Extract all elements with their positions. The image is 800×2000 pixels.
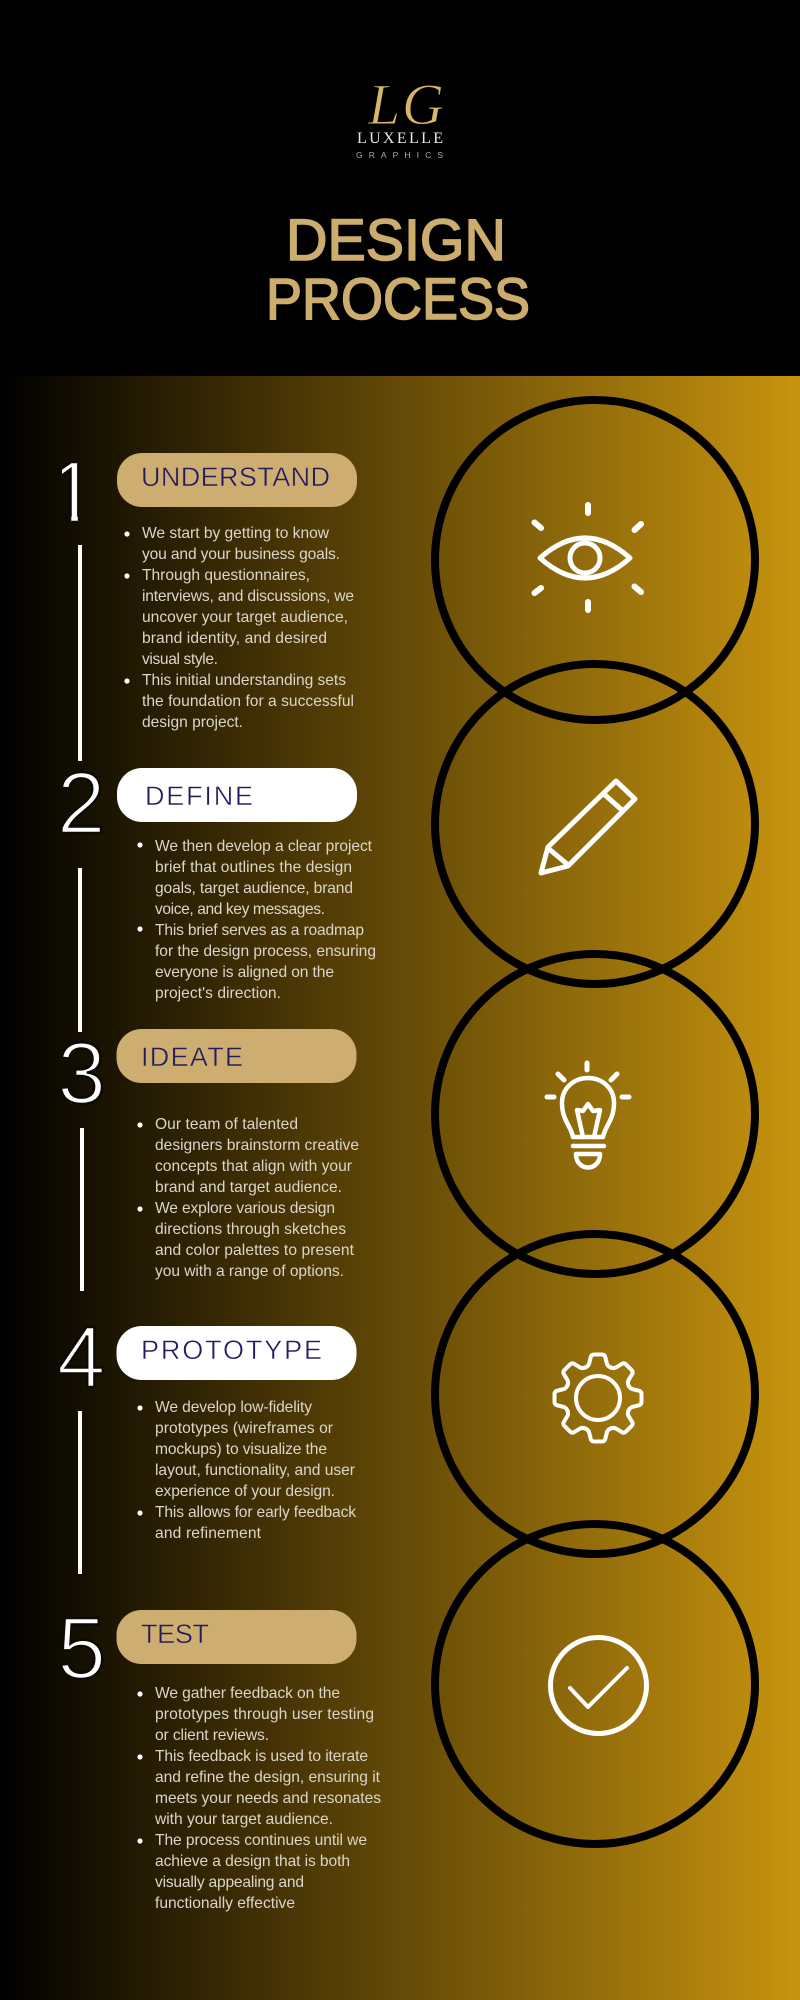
text block: step 1 bullets: brand identity, and desired: [142, 630, 327, 647]
pill: define: [117, 768, 357, 822]
text block: step 3 bullets: We explore various design: [155, 1200, 335, 1217]
text block: step 2 bullets: This brief serves as a roadmap: [155, 922, 364, 939]
logo monogram: G: [402, 72, 444, 137]
text block: step 1 bullets: interviews, and discussions, we: [142, 588, 354, 605]
connector line 3: [80, 1128, 84, 1291]
text block: step 5 bullets: We gather feedback on the: [155, 1685, 340, 1702]
pill: prototype: PROTOTYPE: [141, 1335, 322, 1365]
text block: step 3 bullets: Our team of talented: [155, 1116, 298, 1133]
text block: step 4 bullets: experience of your design.: [155, 1483, 335, 1500]
text block: step 2 bullets: [137, 838, 376, 1002]
pill: test: [116, 1610, 356, 1664]
text block: step 1 bullets: uncover your target audience,: [142, 609, 348, 626]
icon: pencil: [541, 781, 635, 873]
text block: step 4 bullets: prototypes (wireframes or: [155, 1420, 333, 1437]
text block: step 4 bullets: We develop low-fidelity: [155, 1399, 312, 1416]
panel: step 5 test: [58, 1600, 381, 1912]
pill: ideate: IDEATE: [141, 1042, 243, 1072]
text block: step 2 bullets: for the design process, ensuring: [155, 943, 376, 960]
text block: step 3 bullets: you with a range of options.: [155, 1263, 344, 1280]
text block: step 5 bullets: The process continues until we: [155, 1832, 367, 1849]
text block: step 5 bullets: or client reviews.: [155, 1727, 269, 1744]
icon: gear: [554, 1354, 642, 1442]
text block: step 5 bullets: visually appealing and: [155, 1874, 304, 1891]
panel: step 3 ideate: [58, 1025, 359, 1291]
logo: Luxelle Graphics: [356, 72, 444, 160]
text block: step 3 bullets: directions through sketches: [155, 1221, 346, 1238]
text block: step 1 bullets: [124, 525, 354, 731]
logo monogram: [367, 72, 444, 137]
text block: step 5 bullets: achieve a design that is both: [155, 1853, 350, 1870]
icon: check mark: [550, 1638, 646, 1734]
icon: lightbulb: [547, 1063, 629, 1168]
text block: step 5 bullets: and refine the design, ensuring it: [155, 1769, 381, 1786]
pill: ideate: [116, 1029, 356, 1083]
step number 5: 5: [58, 1600, 106, 1697]
panel: step 2 define: [57, 755, 376, 1032]
connector line 2: [78, 868, 82, 1032]
text block: step 1 bullets: We start by getting to know: [142, 525, 330, 542]
logo monogram: L: [367, 72, 400, 137]
text block: step 2 bullets: brief that outlines the design: [155, 859, 352, 876]
text block: step 3 bullets: concepts that align with your: [155, 1158, 352, 1175]
pill: define: DEFINE: [145, 781, 253, 811]
text block: step 4 bullets: layout, functionality, and user: [155, 1462, 355, 1479]
title: PROCESS: [266, 267, 530, 332]
text block: step 4 bullets: This allows for early feedback: [155, 1504, 356, 1521]
text block: step 1 bullets: This initial understanding sets: [142, 672, 346, 689]
text block: step 3 bullets: and color palettes to present: [155, 1242, 355, 1259]
pill: understand: [117, 453, 357, 507]
text block: step 1 bullets: Through questionnaires,: [142, 567, 310, 584]
text block: step 1 bullets: design project.: [142, 714, 243, 731]
logo wordmark: LUXELLE: [357, 130, 443, 147]
connector line 1: [78, 545, 82, 761]
text block: step 1 bullets: the foundation for a successful: [142, 693, 354, 710]
text block: step 4 bullets: and refinement: [155, 1525, 262, 1542]
step number 4: 4: [57, 1309, 105, 1406]
step number 3: 3: [58, 1025, 106, 1122]
text block: step 4 bullets: mockups) to visualize the: [155, 1441, 327, 1458]
icon: eye: [534, 505, 641, 610]
circle 3 with lightbulb icon: [435, 954, 755, 1274]
text block: step 2 bullets: We then develop a clear project: [155, 838, 373, 855]
step number 1: 1: [49, 444, 97, 541]
text block: step 5 bullets: This feedback is used to iterate: [155, 1748, 368, 1765]
text block: step 2 bullets: project's direction.: [155, 985, 281, 1002]
text block: step 5 bullets: meets your needs and resonates: [155, 1790, 381, 1807]
text block: step 3 bullets: [137, 1116, 359, 1280]
connector line 4: [78, 1411, 82, 1574]
title: DESIGN: [286, 208, 506, 273]
circle 2 with pencil icon: [435, 664, 755, 984]
pill: understand: UNDERSTAND: [141, 462, 330, 492]
logo subtitle: GRAPHICS: [356, 150, 443, 160]
panel: step 4 prototype: [57, 1309, 356, 1574]
text block: step 2 bullets: voice, and key messages.: [155, 901, 325, 918]
header background: [0, 0, 800, 376]
text block: step 5 bullets: [137, 1685, 381, 1912]
circle 4 with gear icon: [435, 1234, 755, 1554]
pill: test: TEST: [141, 1619, 209, 1649]
text block: step 2 bullets: everyone is aligned on the: [155, 964, 334, 981]
pill: prototype: [116, 1326, 356, 1380]
text block: step 3 bullets: brand and target audience.: [155, 1179, 342, 1196]
title: [266, 208, 530, 332]
text block: step 1 bullets: you and your business goals.: [142, 546, 340, 563]
circle 1 with eye icon: [435, 400, 755, 720]
text block: step 3 bullets: designers brainstorm creative: [155, 1137, 359, 1154]
panel: step 1 understand: [49, 444, 357, 761]
text block: step 5 bullets: functionally effective: [155, 1895, 295, 1912]
text block: step 1 bullets: visual style.: [142, 651, 218, 668]
text block: step 5 bullets: prototypes through user testing: [155, 1706, 374, 1723]
step number 2: 2: [57, 755, 105, 852]
text block: step 2 bullets: goals, target audience, brand: [155, 880, 353, 897]
text block: step 5 bullets: with your target audience.: [154, 1811, 333, 1828]
circle 5 with check icon: [435, 1524, 755, 1844]
text block: step 4 bullets: [137, 1399, 356, 1542]
